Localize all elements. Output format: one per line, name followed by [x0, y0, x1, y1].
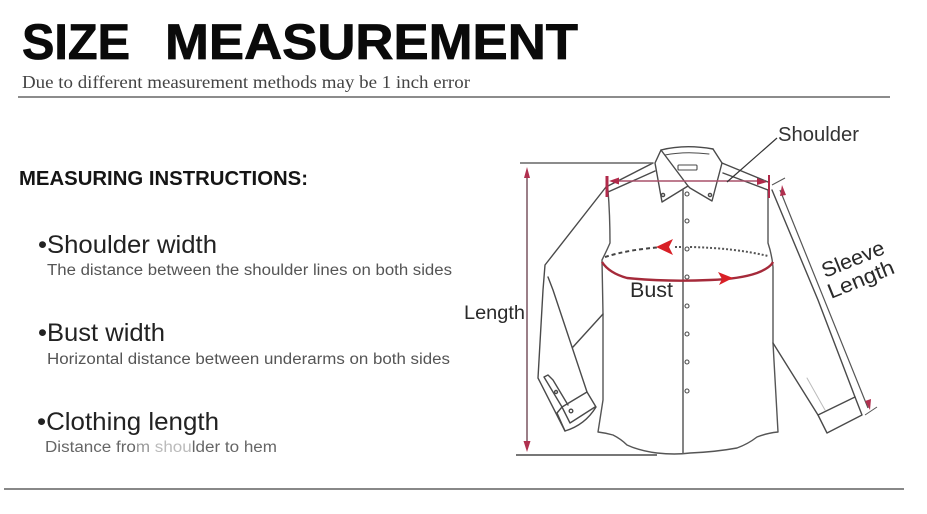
- right shoulder seams: [722, 163, 768, 190]
- instruction: clothing length: •Clothing length: [37, 408, 219, 436]
- title: SIZE: [22, 14, 130, 70]
- instruction: bust width: •Bust width: [38, 319, 165, 347]
- length label: Length: [464, 303, 525, 324]
- left sleeve: [538, 187, 606, 431]
- sleeve length label: Length: [824, 256, 898, 304]
- instructions heading: MEASURING INSTRUCTIONS:: [19, 168, 308, 190]
- buttons: [685, 192, 689, 393]
- instruction: shoulder width: [38, 231, 452, 279]
- title: MEASUREMENT: [165, 14, 578, 70]
- right sleeve: [772, 190, 862, 433]
- instruction: bust width: Horizontal distance between underarms on both sides: [47, 351, 450, 368]
- collar: [655, 147, 722, 202]
- subtitle note: Due to different measurement methods may be 1 inch error: [22, 72, 470, 92]
- shoulder pointer line: [727, 138, 777, 182]
- sleeve length label: [818, 237, 898, 304]
- left shoulder seams: [606, 163, 655, 192]
- instruction: shoulder width: •Shoulder width: [38, 231, 217, 259]
- shoulder label: Shoulder: [778, 124, 859, 146]
- sleeve length label: Sleeve: [818, 237, 888, 283]
- arrow: length measure: [516, 163, 657, 455]
- instruction: clothing length: Distance fro m shoulder to hem: [45, 439, 277, 456]
- arrow: shoulder measure: [607, 175, 769, 198]
- bust label: Bust: [630, 279, 673, 302]
- instruction: bust width: [38, 319, 450, 368]
- instruction: clothing length: [37, 408, 277, 456]
- button placket: [682, 190, 684, 453]
- panel: measuring instructions: [19, 168, 452, 456]
- arrow: sleeve length: [772, 178, 877, 415]
- instruction: shoulder width: The distance between the shoulder lines on both sides: [47, 262, 452, 279]
- shirt diagram: [538, 147, 862, 454]
- shirt body outline: [598, 190, 778, 454]
- arrow: bust back dotted: [605, 239, 768, 257]
- arrow: bust front red: [602, 262, 773, 285]
